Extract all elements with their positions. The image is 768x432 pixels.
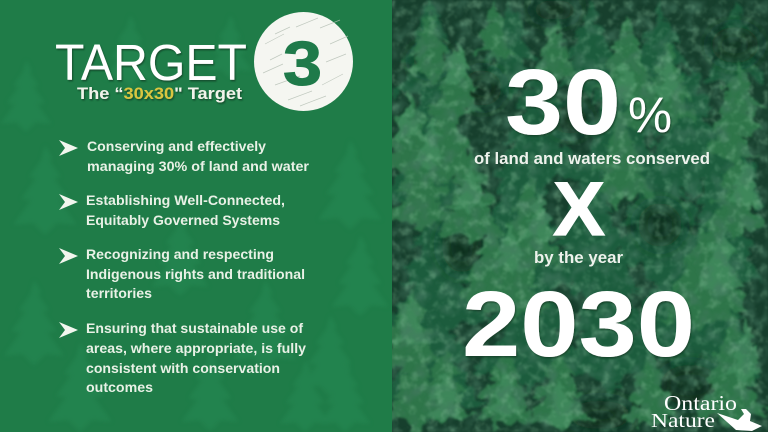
bullet 2: Equitably Governed Systems bbox=[86, 213, 280, 228]
bullet 3: Indigenous rights and traditional bbox=[86, 267, 305, 282]
icon: number 3 badge bbox=[254, 12, 353, 111]
icon: number 3 badge: 3 bbox=[283, 30, 322, 99]
bullet 3 bbox=[59, 247, 305, 301]
logo: Ontario Nature bbox=[651, 391, 762, 432]
caption: land and waters: of land and waters conserved bbox=[474, 150, 710, 168]
bullet 3: territories bbox=[86, 286, 152, 301]
logo: Ontario Nature: Ontario bbox=[664, 391, 737, 415]
bullet 3: Recognizing and respecting bbox=[86, 247, 274, 262]
bullet 2 bbox=[59, 193, 285, 228]
icon: loon bbox=[717, 409, 762, 431]
stat: 30 percent: % bbox=[628, 87, 672, 143]
bullet 1: managing 30% of land and water bbox=[87, 159, 310, 174]
bullet 1: Conserving and effectively bbox=[87, 139, 266, 154]
heading: Target: TARGET bbox=[55, 34, 247, 91]
bullet 4: Ensuring that sustainable use of bbox=[86, 321, 303, 336]
logo: Ontario Nature: Nature bbox=[651, 410, 715, 432]
bullet 4: outcomes bbox=[86, 380, 153, 395]
panel: forest photograph bbox=[376, 0, 768, 432]
stat: 30 percent bbox=[505, 50, 672, 154]
dark gaps between trees bbox=[412, 0, 759, 429]
bullet 1 bbox=[59, 139, 310, 174]
bullet 4 bbox=[59, 321, 306, 395]
stat: 30 percent: 30 bbox=[505, 50, 621, 154]
stat: 2030: 2030 bbox=[462, 272, 695, 376]
subtitle: The “ 30x30 " Target bbox=[77, 85, 243, 103]
panel: green overlay with tree texture bbox=[0, 0, 392, 432]
bullet 4: consistent with conservation bbox=[86, 361, 280, 376]
multiplication X: X bbox=[553, 167, 605, 252]
caption: by the year: by the year bbox=[534, 249, 624, 267]
bullet 2: Establishing Well-Connected, bbox=[86, 193, 285, 208]
bullet 4: areas, where appropriate, is fully bbox=[86, 341, 306, 356]
